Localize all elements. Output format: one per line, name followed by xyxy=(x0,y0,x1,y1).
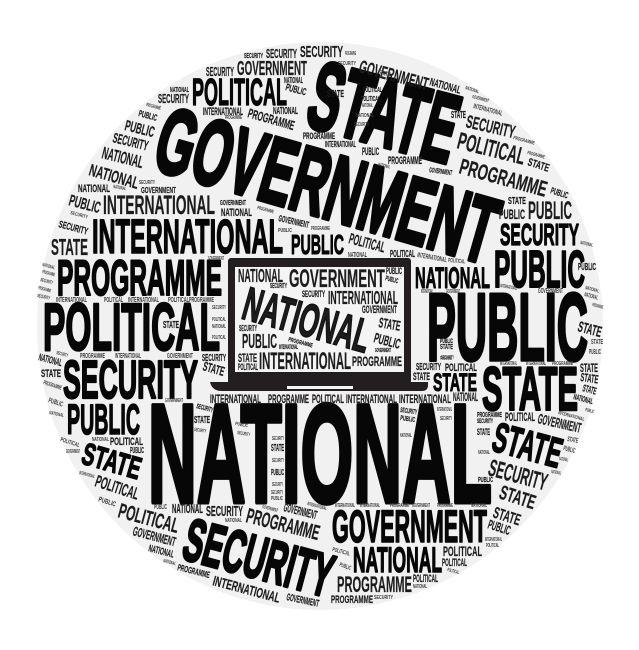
tiny words group: left edge: POLITICAL xyxy=(212,317,226,323)
word: PUBLIC left rotated: PUBLIC xyxy=(67,192,103,217)
tiny words group: upper area: PROGRAMME xyxy=(526,150,546,161)
tiny words group: upper area: NATIONAL xyxy=(378,162,391,170)
tiny words group: lower area: NATIONAL xyxy=(471,503,487,509)
largest words xyxy=(43,40,588,610)
tiny words group: lower area: INTERNATIONAL xyxy=(500,361,517,367)
medium words: POLITICAL xyxy=(505,410,535,424)
word: STATE under public: STATE xyxy=(433,369,477,397)
medium words: SECURITY xyxy=(206,503,243,520)
medium words: SECURITY xyxy=(206,64,234,79)
tiny words group: left edge: NATIONAL xyxy=(162,558,177,567)
tiny words group: upper area: PROGRAMME xyxy=(225,115,242,121)
words inside laptop screen: NATIONAL xyxy=(238,266,283,286)
word: PUBLIC far right rotated: PUBLIC xyxy=(549,185,570,201)
word: STATE edge right 1: STATE xyxy=(576,318,604,341)
medium words: POLITICAL xyxy=(347,230,387,256)
circular background xyxy=(37,42,603,610)
word: GOVERNMENT middle small: GOVERNMENT xyxy=(220,200,246,207)
medium words xyxy=(37,44,604,610)
word: PUBLIC top rotated: PUBLIC xyxy=(284,82,307,98)
medium words: PROGRAMME xyxy=(388,155,422,167)
tiny words group: upper area: GOVERNMENT xyxy=(446,289,460,295)
tiny words group: lower area: PUBLIC xyxy=(235,421,249,429)
tiny words group: upper area: NATIONAL xyxy=(464,85,480,95)
medium words: STATE xyxy=(580,361,598,375)
word: SECURITY right column: SECURITY xyxy=(477,419,493,425)
word: PUBLIC left rotated 2: PUBLIC xyxy=(123,117,156,141)
tiny words group: upper area: NATIONAL xyxy=(584,285,600,295)
word cloud infographic: PROGRAMME xyxy=(591,302,604,311)
largest words: INTERNATIONAL xyxy=(92,211,283,264)
tiny words group: lower area: NATIONAL xyxy=(400,433,412,439)
tiny words group: lower area: STATE xyxy=(591,339,603,346)
medium words: STATE xyxy=(271,443,284,454)
word: INTERNATIONAL band 3: INTERNATIONAL xyxy=(399,392,451,406)
tiny words group: lower area xyxy=(154,339,603,601)
tiny words group: upper area: POLITICAL xyxy=(448,258,465,265)
word: PUBLIC in screen upper right: PUBLIC xyxy=(384,275,399,285)
tiny words group: upper area: PROGRAMME xyxy=(256,205,275,215)
word: PUBLIC middle: PUBLIC xyxy=(291,229,344,260)
word: SECURITY top 3: SECURITY xyxy=(300,44,343,61)
medium words: PUBLIC xyxy=(362,146,379,158)
medium words: PUBLIC xyxy=(271,468,284,477)
tiny words group: upper area: INTERNATIONAL xyxy=(500,283,517,292)
word: STATE inside political: STATE xyxy=(163,320,179,331)
word: POLITICAL lower left rotated: POLITICAL xyxy=(116,500,182,538)
word: GOVERNMENT under national left: GOVERNMENT xyxy=(141,186,176,195)
word: PROGRAMME in screen rotated: PROGRAMME xyxy=(287,337,313,349)
laptop screen frame xyxy=(228,258,411,384)
tiny words group: left edge: POLITICAL xyxy=(59,437,80,449)
word: PROGRAMME in screen: PROGRAMME xyxy=(352,353,402,369)
tiny words group: lower area: GOVERNMENT xyxy=(165,398,183,404)
word: GOVERNMENT in screen: GOVERNMENT xyxy=(289,265,385,293)
word: SECURITY right rotated: SECURITY xyxy=(464,111,517,142)
tiny words group: upper area: PUBLIC xyxy=(278,228,292,234)
medium words: SECURITY xyxy=(266,46,297,61)
tiny words group: lower area: INTERNATIONAL xyxy=(306,501,327,512)
word: POLITICAL inside state 2: POLITICAL xyxy=(361,96,380,103)
tiny words group: left edge: INTERNATIONAL xyxy=(56,297,87,304)
word: PROGRAMME under state: PROGRAMME xyxy=(303,131,335,141)
word: PUBLIC in screen right: PUBLIC xyxy=(372,329,402,352)
medium words: PUBLIC xyxy=(528,197,572,225)
tiny words group: lower area: SECURITY xyxy=(440,416,452,422)
word: PROGRAMME lower: PROGRAMME xyxy=(337,572,412,597)
word: NATIONAL top right: NATIONAL xyxy=(428,76,462,97)
word: NATIONAL in screen rotated: NATIONAL xyxy=(237,277,377,363)
tiny words group: lower area: GOVERNMENT xyxy=(412,503,430,509)
tiny words group: left edge: INTERNATIONAL xyxy=(78,470,95,480)
tiny words group: lower area: SECURITY xyxy=(272,458,284,464)
words inside laptop screen: SECURITY xyxy=(270,283,287,290)
tiny words group: upper area: SECURITY xyxy=(354,122,369,128)
tiny words group: lower area: NATIONAL xyxy=(413,584,427,590)
tiny words group: lower area: POLITICAL xyxy=(486,543,499,549)
word: STATE top: STATE xyxy=(298,40,471,184)
tiny words group: upper area: SECURITY xyxy=(69,210,89,221)
tiny words group: lower area: PUBLIC xyxy=(589,349,601,356)
tiny words group: upper area xyxy=(69,51,604,311)
word: INTERNATIONAL bottom rotated: INTERNATIONAL xyxy=(211,572,282,606)
word: POLITICAL lower right: POLITICAL xyxy=(443,543,482,559)
tiny words group: upper area: NATIONAL xyxy=(580,240,594,249)
tiny words group: left edge: PUBLIC xyxy=(97,496,117,508)
tiny words group: lower area: SECURITY xyxy=(237,430,251,438)
words inside laptop screen: PUBLIC xyxy=(242,331,277,353)
tiny words group: left edge: NATIONAL xyxy=(92,437,109,443)
tiny words group: upper area: SECURITY xyxy=(139,180,155,186)
word: SECURITY left rotated: SECURITY xyxy=(57,219,89,238)
tiny words group: left edge xyxy=(37,262,226,567)
word: STATE right small: STATE xyxy=(508,196,526,207)
tiny words group: left edge: PROGRAMME xyxy=(189,297,214,304)
word: STATE rotated left: STATE xyxy=(78,436,145,486)
word: NATIONAL left small: NATIONAL xyxy=(78,183,110,195)
tiny words group: lower area: SECURITY xyxy=(272,436,284,442)
word: SECURITY bottom rotated: SECURITY xyxy=(177,506,341,610)
tiny words group: left edge: INTERNATIONAL xyxy=(115,353,141,360)
word: STATE in screen left: STATE xyxy=(238,351,257,365)
tiny words group: left edge: PROGRAMME xyxy=(42,380,62,392)
tiny words group: left edge: NATIONAL xyxy=(212,324,226,330)
laptop icon xyxy=(210,258,428,391)
word: POLITICAL beside laptop: POLITICAL xyxy=(445,362,477,374)
word: PROGRAMME bottom: PROGRAMME xyxy=(331,594,373,606)
word: STATE left: STATE xyxy=(51,234,88,260)
word: POLITICAL left rotated: POLITICAL xyxy=(93,472,141,504)
word: NATIONAL left rotated 2: NATIONAL xyxy=(100,143,145,172)
tiny words group: left edge: NATIONAL xyxy=(49,410,65,419)
laptop screen xyxy=(235,267,404,372)
tiny words group: lower area: GOVERNMENT xyxy=(261,504,278,514)
medium words: SECURITY xyxy=(400,407,418,416)
medium words: GOVERNMENT xyxy=(131,523,178,549)
medium words: POLITICAL xyxy=(390,249,415,260)
words inside laptop screen: GOVERNMENT xyxy=(375,348,391,354)
tiny words group: upper area: PROGRAMME xyxy=(345,51,356,57)
tiny words group: left edge: SECURITY xyxy=(39,277,54,286)
word: PROGRAMME bottom rotated: PROGRAMME xyxy=(244,505,322,545)
tiny words group: lower area: INTERNATIONAL xyxy=(526,361,546,367)
medium words: GOVERNMENT xyxy=(429,167,453,177)
tiny words group: upper area: INTERNATIONAL xyxy=(472,103,504,118)
medium words: POLITICAL xyxy=(413,573,438,585)
word: STATE far right rotated: STATE xyxy=(526,156,551,175)
tiny words group: upper area: INTERNATIONAL xyxy=(417,252,448,264)
word: STATE lower right 1: STATE xyxy=(496,482,538,514)
tiny words group: upper area: PROGRAMME xyxy=(512,135,536,147)
word: POLITICAL large: POLITICAL xyxy=(43,290,220,365)
word: PUBLIC lower right: PUBLIC xyxy=(486,517,513,538)
tiny words group: left edge: SECURITY xyxy=(37,293,51,302)
word: SECURITY inside national left: SECURITY xyxy=(195,403,214,414)
laptop icon: PUBLIC xyxy=(386,266,402,276)
word: STATE rotated right: STATE xyxy=(488,413,567,477)
word: PUBLIC small under L: PUBLIC xyxy=(478,477,493,484)
tiny words group: lower area: PUBLIC xyxy=(271,496,283,502)
tiny words group: left edge: POLITICAL xyxy=(212,335,226,341)
tiny words group: left edge: SECURITY xyxy=(55,350,69,359)
word: PUBLIC left rotated 3: PUBLIC xyxy=(137,108,159,123)
word: SECURITY far right rotated: SECURITY xyxy=(485,455,550,496)
tiny words group: lower area: INTERNATIONAL xyxy=(485,537,502,543)
tiny words group: lower area: POLITICAL xyxy=(331,547,351,558)
word: SECURITY in screen upper: SECURITY xyxy=(302,289,325,299)
medium words: SECURITY xyxy=(202,353,226,364)
words inside laptop screen: GOVERNMENT xyxy=(362,304,397,316)
words inside laptop screen: SECURITY xyxy=(239,324,257,333)
tiny words group: upper area: NATIONAL xyxy=(583,292,599,302)
tiny words group: upper area: PROGRAMME xyxy=(145,102,162,112)
word: NATIONAL beside political top: NATIONAL xyxy=(170,87,189,94)
tiny words group: left edge: POLITICAL xyxy=(168,297,189,304)
word: INTERNATIONAL band 1: INTERNATIONAL xyxy=(210,392,261,406)
tiny words group: left edge: NATIONAL xyxy=(41,262,56,271)
tiny words group: lower area: PUBLIC xyxy=(154,504,167,511)
tiny words group: lower area: PROGRAMME xyxy=(390,503,409,509)
tiny words group: lower area: PROGRAMME xyxy=(437,503,453,509)
laptop base xyxy=(210,382,428,391)
tiny words group: upper area: NATIONAL xyxy=(113,184,126,192)
tiny words group: upper area: INTERNATIONAL xyxy=(421,289,433,295)
word: STATE edge right 3: STATE xyxy=(580,370,599,386)
tiny words group: lower area: SECURITY xyxy=(272,482,283,488)
medium words: SECURITY xyxy=(158,91,189,106)
tiny words group: upper area: NATIONAL xyxy=(356,113,374,119)
tiny words group: left edge: PUBLIC xyxy=(47,397,64,409)
word: STATE in screen right: STATE xyxy=(377,314,402,334)
tiny words group: lower area: NATIONAL xyxy=(225,518,242,524)
word: NATIONAL left rotated: NATIONAL xyxy=(147,543,175,561)
medium words: NATIONAL xyxy=(284,76,303,85)
largest words: SECURITY xyxy=(63,350,198,410)
tiny words group: upper area: GOVERNMENT xyxy=(471,94,489,104)
tiny words group: upper area: GOVERNMENT xyxy=(208,256,224,262)
word: PROGRAMME right column: PROGRAMME xyxy=(477,412,502,419)
medium words: POLITICAL xyxy=(442,557,467,569)
medium words: GOVERNMENT xyxy=(237,58,307,80)
tiny words group: left edge: PROGRAMME xyxy=(41,269,56,278)
tiny words group: lower area: NATIONAL xyxy=(551,469,562,477)
medium words: GOVERNMENT xyxy=(285,592,320,610)
word: STATE rotated near laptop: STATE xyxy=(201,358,227,379)
tiny words group: lower area: INTERNATIONAL xyxy=(360,503,380,509)
word: PUBLIC inside national right: PUBLIC xyxy=(400,415,416,424)
word: NATIONAL middle small: NATIONAL xyxy=(221,207,252,219)
word: PROGRAMME lower left: PROGRAMME xyxy=(177,562,211,580)
word: NATIONAL left rotated 1: NATIONAL xyxy=(87,161,141,193)
tiny words group: left edge: GOVERNMENT xyxy=(167,353,193,360)
tiny words group: lower area: INTERNATIONAL xyxy=(437,407,452,413)
tiny words group: lower area: NATIONAL xyxy=(559,456,569,464)
medium words: PUBLIC xyxy=(499,206,525,222)
medium words: STATE xyxy=(477,427,490,437)
largest words: NATIONAL xyxy=(415,262,490,295)
medium words: INTERNATIONAL xyxy=(325,140,356,149)
medium words: GOVERNMENT xyxy=(536,410,583,436)
largest words: POLITICAL xyxy=(192,72,287,114)
words inside laptop screen xyxy=(237,265,402,375)
tiny words group: lower area: SECURITY xyxy=(441,355,454,361)
tiny words group: upper area: SECURITY xyxy=(338,61,356,67)
medium words: GOVERNMENT xyxy=(282,500,319,522)
medium words: STATE xyxy=(451,110,466,121)
words inside laptop screen: INTERNATIONAL xyxy=(259,348,351,375)
tiny words group: upper area: PROGRAMME xyxy=(311,226,330,232)
tiny words group: left edge: POLITICAL xyxy=(104,297,123,304)
tiny words group: left edge: PROGRAMME xyxy=(80,353,105,360)
tiny words group: lower area: INTERNATIONAL xyxy=(335,503,355,509)
word: NATIONAL edge right: NATIONAL xyxy=(572,392,594,406)
word: STATE in big public: STATE xyxy=(440,344,453,351)
word: PROGRAMME right rotated: PROGRAMME xyxy=(457,154,550,202)
laptop notch xyxy=(287,386,353,389)
tiny words group: upper area: NATIONAL xyxy=(348,252,367,259)
word: PROGRAMME band: PROGRAMME xyxy=(268,392,309,406)
word: STATE inside national: STATE xyxy=(194,415,210,426)
word: STATE lower right 2: STATE xyxy=(491,505,523,530)
word: SECURITY left rotated 2: SECURITY xyxy=(111,129,150,154)
word: POLITICAL inside state 1: POLITICAL xyxy=(363,87,382,94)
tiny words group: left edge: INTERNATIONAL xyxy=(128,297,159,304)
word: INTERNATIONAL band 2: INTERNATIONAL xyxy=(346,392,397,406)
tiny words group: left edge: PROGRAMME xyxy=(37,285,52,294)
word: NATIONAL left edge: NATIONAL xyxy=(37,352,63,369)
word: SECURITY top 1: SECURITY xyxy=(244,53,263,60)
tiny words group: upper area: STATE xyxy=(377,69,391,79)
medium words: STATE xyxy=(581,383,598,398)
word: POLITICAL band: POLITICAL xyxy=(312,392,344,406)
medium words: NATIONAL xyxy=(273,106,298,117)
tiny words group: lower area: SECURITY xyxy=(374,595,393,601)
medium words: SECURITY xyxy=(416,362,441,373)
word: PROGRAMME upper rotated: PROGRAMME xyxy=(246,105,297,133)
tiny words group: upper area: NATIONAL xyxy=(362,103,373,109)
word: GOVERNMENT middle rotated: GOVERNMENT xyxy=(278,213,310,230)
tiny words group: lower area: PROGRAMME xyxy=(440,356,452,362)
tiny words group: lower area: STATE xyxy=(567,436,579,445)
tiny words group: upper area: GOVERNMENT xyxy=(538,288,563,295)
word: INTERNATIONAL upper left: INTERNATIONAL xyxy=(103,190,215,220)
tiny words group: lower area: INTERNATIONAL xyxy=(557,410,585,423)
medium words: STATE xyxy=(413,371,430,383)
word: STATE inside state: STATE xyxy=(327,89,344,100)
tiny filler words xyxy=(37,51,604,601)
word: GOVERNMENT top right: GOVERNMENT xyxy=(357,57,431,94)
word: PUBLIC in big public: PUBLIC xyxy=(440,339,453,345)
words inside laptop screen: POLITICAL xyxy=(238,362,258,372)
medium words: PUBLIC xyxy=(578,262,596,273)
tiny words group: lower area: PROGRAMME xyxy=(552,361,573,367)
words inside laptop screen: INTERNATIONAL xyxy=(279,345,298,351)
largest words: NATIONAL xyxy=(353,541,442,580)
tiny words group: lower area: POLITICAL xyxy=(446,567,460,576)
tiny words group: lower area: PUBLIC xyxy=(584,407,595,415)
largest words: PROGRAMME xyxy=(57,250,222,306)
words inside laptop screen: INTERNATIONAL xyxy=(328,288,398,308)
word: POLITICAL under public: POLITICAL xyxy=(110,436,143,448)
tiny words group: lower area: SECURITY xyxy=(271,490,283,496)
medium words: NATIONAL xyxy=(172,501,203,516)
tiny words group: lower area: PUBLIC xyxy=(562,445,576,455)
tiny words group: left edge: SECURITY xyxy=(212,305,226,311)
medium words: NATIONAL xyxy=(453,390,478,404)
medium words: PUBLIC xyxy=(130,446,144,455)
tiny words group: lower area: PUBLIC xyxy=(338,562,352,572)
tiny words group: left edge: GOVERNMENT xyxy=(66,449,80,455)
tiny words group: lower area: NATIONAL xyxy=(478,450,490,456)
medium words: INTERNATIONAL xyxy=(203,106,243,118)
word: POLITICAL right rotated: POLITICAL xyxy=(455,128,528,171)
tiny words group: lower area: SECURITY xyxy=(194,427,207,435)
largest words: PUBLIC xyxy=(67,396,140,444)
word: STATE left edge: STATE xyxy=(41,368,61,380)
